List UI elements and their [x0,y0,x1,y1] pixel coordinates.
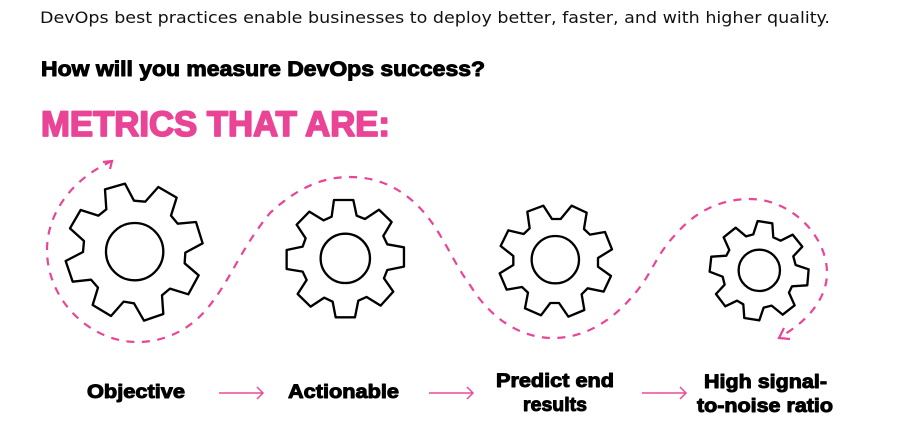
label: high signal-to-noise ratio: to-noise ratio [697,395,833,417]
gear 2 [287,200,404,317]
label: predict end results: Predict end [496,370,614,392]
label: high signal-to-noise ratio [697,371,833,417]
arrow 3 [642,387,686,399]
question heading: How will you measure DevOps success? [41,57,485,81]
intro text: DevOps best practices enable businesses to deploy better, faster, and with higher quality. [40,8,830,27]
arrow 1 [219,387,263,399]
label: objective: Objective [87,381,185,403]
dashed path with arrowheads [47,161,827,342]
gear 3 [500,206,612,317]
gear 1 [66,184,203,321]
label: high signal-to-noise ratio: High signal- [704,371,827,393]
metrics title: METRICS THAT ARE: [41,104,390,144]
arrow 2 [429,387,473,399]
label: predict end results [496,370,614,416]
gear 4 [710,221,809,320]
label: predict end results: results [523,394,587,416]
label: actionable: Actionable [288,381,399,403]
